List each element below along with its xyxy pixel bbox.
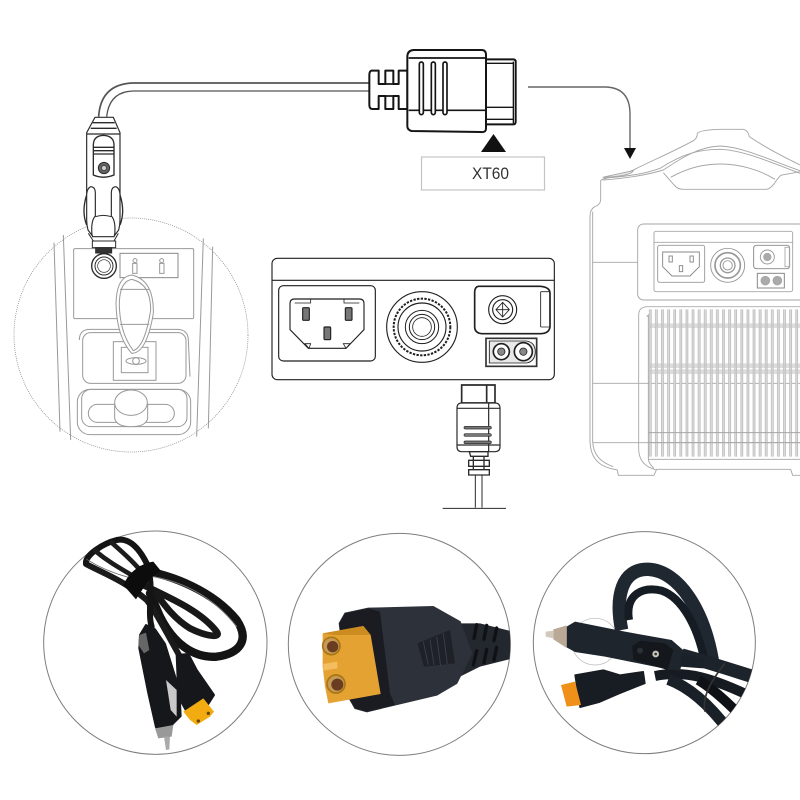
connector nose [462, 385, 495, 403]
station body [590, 179, 800, 475]
lighter plug [546, 622, 705, 671]
XT60 label box: XT60 [472, 164, 509, 183]
lighter socket [92, 254, 116, 278]
XT60 socket [486, 338, 537, 366]
cable stub [443, 475, 506, 508]
lighter plug [138, 625, 181, 750]
station control panel [638, 224, 800, 300]
AC inlet [279, 286, 375, 361]
portable power station outline [590, 129, 800, 475]
cigarette lighter plug and cable [84, 83, 370, 278]
car console inset [14, 218, 248, 452]
station vent grille [639, 307, 800, 470]
moulded boot [460, 623, 513, 677]
round DC socket [387, 292, 457, 362]
connector housing [457, 403, 500, 452]
rotary knob [77, 389, 191, 435]
photo circle: plug and cable loop [533, 532, 762, 754]
XT60 boot [177, 654, 214, 725]
socket label plate [120, 253, 178, 278]
cable [99, 83, 370, 117]
strain relief [469, 452, 489, 475]
velcro strap [123, 562, 161, 599]
sticker ring [572, 618, 618, 665]
cable loop [619, 569, 762, 730]
dotted zoom circle [14, 218, 248, 452]
console side rails [54, 235, 213, 440]
gear shifter [79, 275, 190, 383]
photo circle: coiled cable [44, 531, 267, 754]
port panel close-up [272, 258, 554, 380]
XT60 housing [323, 626, 381, 703]
strain relief [369, 71, 407, 109]
small XT60 connector plugging in [443, 385, 506, 508]
console upper panel [74, 249, 194, 319]
circle outline [533, 532, 755, 754]
XT60 connector large [369, 50, 516, 132]
station handle [602, 129, 800, 179]
capped port [475, 286, 550, 334]
XT60 boot and housing [561, 670, 645, 707]
panel frame [272, 258, 554, 380]
XT60 label box [422, 157, 544, 190]
connector housing [407, 50, 486, 132]
plug body [84, 117, 123, 253]
arrow to power station [528, 87, 636, 159]
circle outline [44, 531, 267, 754]
circle outline [288, 533, 510, 755]
photo circle: XT60 close-up [288, 533, 513, 755]
pointer triangle [481, 134, 506, 152]
coiled cables [86, 540, 243, 657]
